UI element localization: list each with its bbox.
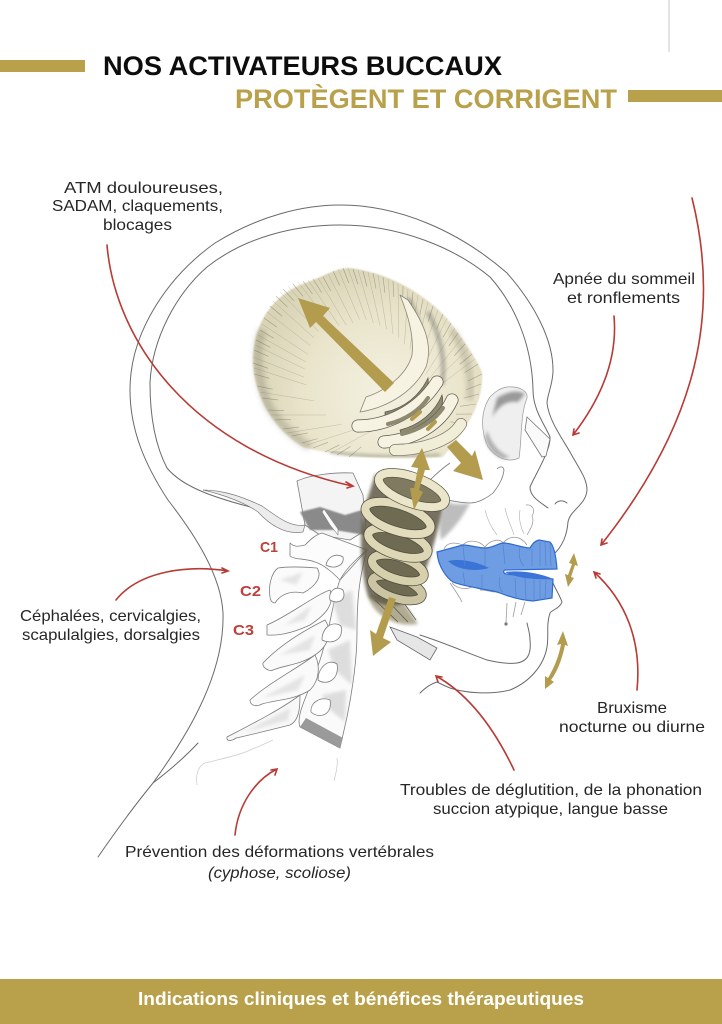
temporal arrow bbox=[298, 298, 394, 392]
label: prévention: Prévention des déformations vertébrales bbox=[125, 844, 434, 861]
label: ATM bbox=[52, 180, 223, 234]
teeth above mouth guard bbox=[444, 537, 527, 602]
label: bruxisme: Bruxisme bbox=[597, 700, 667, 717]
arrow: apnée bbox=[573, 316, 615, 435]
lower tendon spring bbox=[361, 466, 449, 625]
vertebra labels: C2 bbox=[240, 583, 261, 600]
vertebra labels: C3 bbox=[233, 622, 254, 639]
label: apnée bbox=[553, 271, 695, 307]
title: NOS ACTIVATEURS BUCCAUX bbox=[103, 51, 502, 81]
gold arrows bbox=[370, 440, 578, 689]
label: bruxisme: nocturne ou diurne bbox=[559, 719, 705, 736]
title bbox=[103, 51, 617, 114]
arrow: troubles bbox=[436, 676, 514, 770]
label: céphalées: scapulalgies, dorsalgies bbox=[22, 627, 200, 644]
label: prévention: (cyphose, scoliose) bbox=[208, 865, 351, 882]
label: troubles: Troubles de déglutition, de la phonation bbox=[400, 782, 702, 799]
arrow: ATM bbox=[107, 245, 353, 488]
arrow: prévention bbox=[235, 769, 277, 835]
label: apnée: et ronflements bbox=[567, 290, 680, 307]
lower neck faint lines bbox=[197, 740, 337, 785]
label: ATM: ATM douloureuses, bbox=[64, 180, 223, 197]
label: apnée: Apnée du sommeil bbox=[553, 271, 695, 288]
label: bruxisme bbox=[559, 700, 705, 736]
vertebra labels: C1 bbox=[260, 539, 278, 556]
teeth roots below guard bbox=[504, 602, 525, 626]
footer band bbox=[0, 979, 722, 1024]
label: troubles: succion atypique, langue basse bbox=[433, 801, 668, 818]
footer band: Indications cliniques et bénéfices thérapeutiques bbox=[138, 989, 584, 1009]
head outline bbox=[98, 205, 587, 857]
label: troubles bbox=[400, 782, 702, 818]
arrow: céphalées bbox=[116, 568, 228, 600]
vertebra labels bbox=[233, 539, 278, 639]
temporal muscle bbox=[253, 268, 482, 459]
blue mouth guard bbox=[437, 540, 557, 601]
label: céphalées bbox=[20, 608, 201, 644]
upper tendon coils bbox=[358, 295, 461, 450]
skull: orbit and cheek bbox=[430, 387, 550, 540]
label: prévention bbox=[125, 844, 434, 882]
label: céphalées: Céphalées, cervicalgies, bbox=[20, 608, 201, 625]
mandible tube bbox=[390, 627, 437, 660]
occipital bone bbox=[203, 490, 305, 533]
cervical vertebrae bbox=[227, 473, 367, 748]
arrow: bruxisme bbox=[594, 572, 638, 690]
title: PROTÈGENT ET CORRIGENT bbox=[235, 83, 617, 114]
label: ATM: SADAM, claquements, bbox=[52, 198, 223, 215]
arrow: long right bbox=[601, 198, 704, 545]
label: ATM: blocages bbox=[103, 217, 172, 234]
